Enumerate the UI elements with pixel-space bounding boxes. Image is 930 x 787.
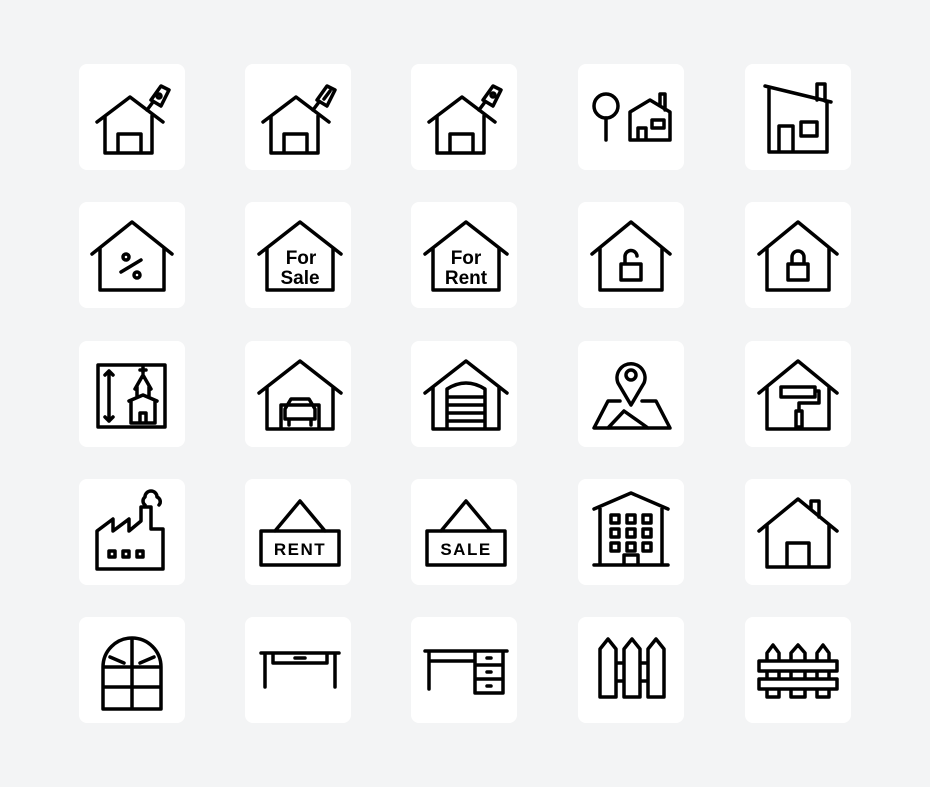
icon tile: fence — [578, 617, 684, 723]
icon tile: house with chimney — [745, 479, 851, 585]
icon tile: house price tag heart — [79, 64, 185, 170]
icon tile: house for sale: For — [286, 248, 317, 269]
icon tile: house for rent: For — [451, 248, 482, 269]
icon tile: house for rent: Rent — [445, 268, 488, 289]
icon tile: apartment building — [578, 479, 684, 585]
icon tile: modern house — [745, 64, 851, 170]
icon tile: house unlocked — [578, 202, 684, 308]
icon tile: tree and house — [578, 64, 684, 170]
icon tile: house for sale — [245, 202, 351, 308]
icon tile: picket fence — [745, 617, 851, 723]
icon tile: sale sign: SALE — [440, 540, 492, 559]
icon tile: house percent — [79, 202, 185, 308]
icon tile: house price tag star — [411, 64, 517, 170]
icon tile: house price tag percent — [245, 64, 351, 170]
icon tile: garage door — [411, 341, 517, 447]
icon tile: rent sign: RENT — [274, 540, 326, 559]
icon tile: house for rent — [411, 202, 517, 308]
icon tile: house for sale: Sale — [280, 268, 320, 289]
icon tile: garage with car — [245, 341, 351, 447]
icon tile: table — [245, 617, 351, 723]
icon tile: map pin — [578, 341, 684, 447]
icon tile: arched window — [79, 617, 185, 723]
icon tile: sale sign — [411, 479, 517, 585]
icon tile: house paint roller — [745, 341, 851, 447]
icon tile: church blueprint — [79, 341, 185, 447]
icon tile: desk with drawers — [411, 617, 517, 723]
icon tile: rent sign — [245, 479, 351, 585]
icon tile: factory — [79, 479, 185, 585]
icon tile: house locked — [745, 202, 851, 308]
